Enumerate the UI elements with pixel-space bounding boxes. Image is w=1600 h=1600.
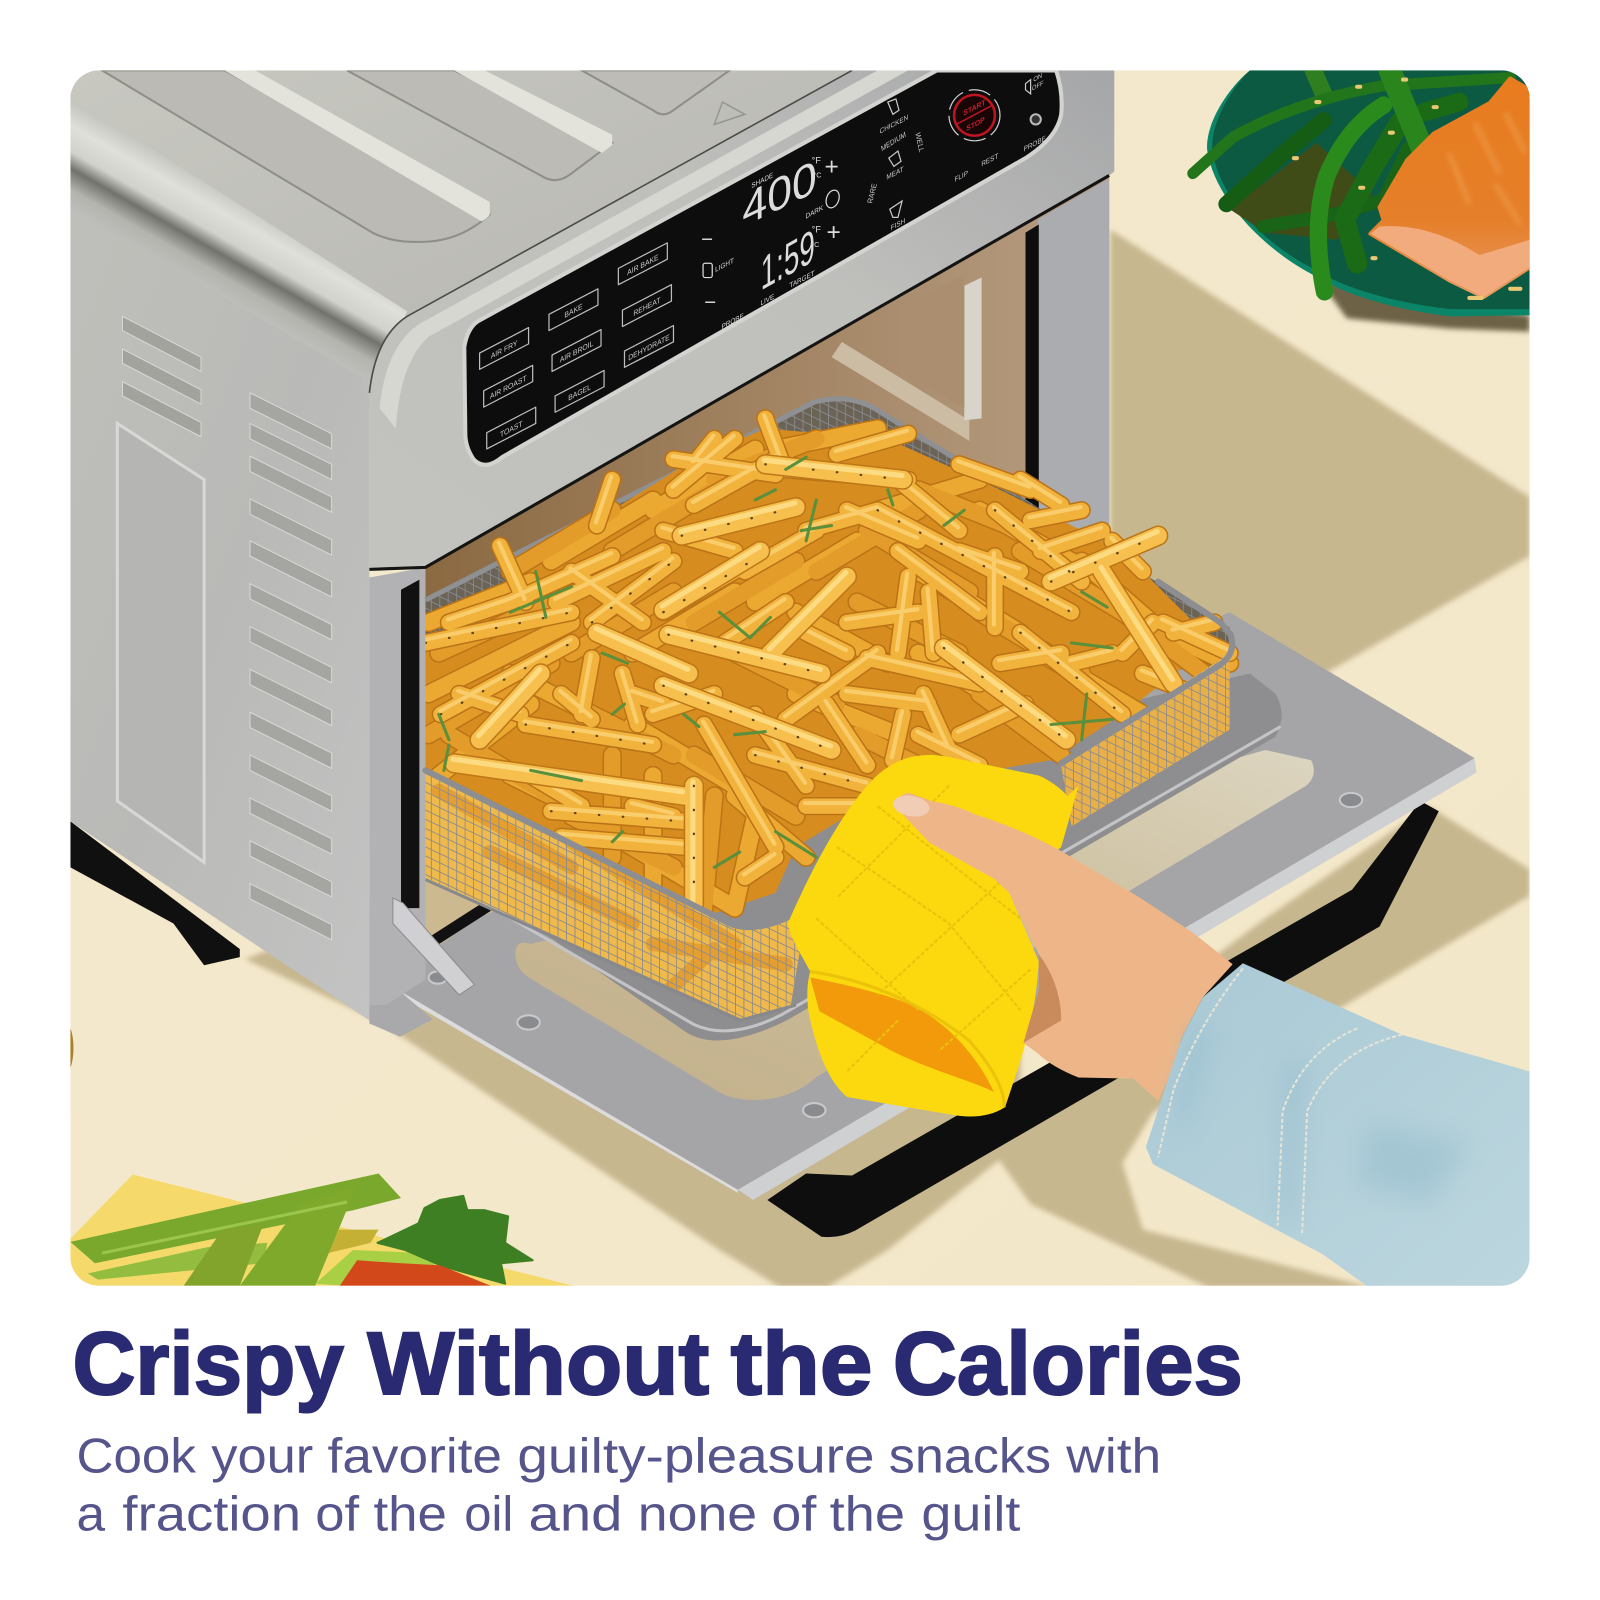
subtitle: with [1065, 1429, 1161, 1483]
start stop button [949, 90, 1000, 141]
fries behind mesh [439, 791, 786, 995]
mode button labels: DEHYDRATE [628, 332, 670, 363]
display readout: °F [812, 155, 821, 165]
oven mitt [788, 755, 1079, 1117]
door front lip [738, 758, 1477, 1200]
basket front mesh and rim [426, 582, 1232, 1020]
mitt fold shadow [810, 978, 994, 1092]
start stop button: STOP [966, 115, 985, 133]
subtitle: and [529, 1488, 622, 1542]
display readout: SHADE [751, 171, 773, 190]
subtitle: of [315, 1488, 360, 1542]
rounded top bevel [70, 97, 407, 408]
door hinge arm [393, 898, 474, 995]
mode button labels: AIR BAKE [627, 252, 659, 277]
subtitle: guilt [921, 1488, 1021, 1542]
plate shadow [1328, 285, 1530, 336]
subtitle: guilty-pleasure [517, 1429, 874, 1483]
front left mesh [426, 770, 806, 1020]
probe presets [865, 72, 1046, 232]
front right mesh [1061, 653, 1230, 827]
basket back mesh [426, 398, 1230, 714]
sleeve denim fade [1173, 1020, 1469, 1224]
mode button labels: BAGEL [568, 382, 591, 403]
hand [891, 793, 1233, 1101]
door handle [767, 801, 1439, 1237]
subtitle [77, 1429, 1161, 1542]
plate with salmon and green beans [1193, 70, 1530, 332]
tan gap behind hinge [426, 878, 440, 891]
oven body [70, 70, 1114, 1037]
probe port [1031, 114, 1041, 124]
probe presets: ON [1033, 72, 1042, 84]
salmon flesh underside [1370, 226, 1530, 297]
side face [70, 209, 369, 1020]
probe presets: RARE [865, 182, 879, 204]
celery sticks [70, 1173, 401, 1263]
salmon glaze streaks [1449, 112, 1526, 224]
thumbnail [891, 793, 931, 819]
mode button labels [490, 252, 670, 439]
fries deep layer [429, 429, 1230, 908]
herb sprigs [439, 457, 1112, 867]
door glass [515, 750, 1314, 1100]
countertop background [70, 70, 1530, 1286]
oven logo [714, 102, 745, 124]
side vents long [250, 393, 332, 940]
probe presets: FISH [891, 217, 905, 232]
display readout: 1:59 [761, 220, 815, 301]
plate [1207, 70, 1530, 316]
band top edge [369, 70, 852, 393]
preset icons [888, 80, 1031, 217]
display readout: °F [812, 225, 821, 235]
display readout: − [704, 292, 716, 314]
display readout [701, 151, 841, 331]
small counter object [61, 1026, 73, 1070]
cavity rails [832, 342, 969, 441]
mode button labels: BAKE [564, 302, 583, 320]
yellow napkin, celery and sauce [70, 1173, 573, 1286]
left front column [369, 567, 426, 1005]
display readout: + [827, 219, 841, 246]
title: Calories [893, 1314, 1243, 1413]
sleeve stitching [1158, 968, 1402, 1236]
mitt fold edge [810, 971, 1004, 1107]
subtitle: Cook [77, 1429, 196, 1483]
oven cavity [426, 176, 1110, 597]
display readout: LIVE [760, 292, 774, 308]
title: Crispy [72, 1314, 344, 1413]
raised top panels [102, 70, 490, 242]
display readout: + [824, 153, 839, 180]
right front column [1038, 178, 1110, 542]
subtitle: oil [464, 1488, 513, 1542]
photo panel [61, 70, 1530, 1288]
subtitle: favorite [328, 1429, 502, 1483]
title: the [731, 1314, 872, 1413]
left slot [401, 580, 419, 908]
display readout: DARK [805, 204, 823, 221]
probe presets: OFF [1032, 80, 1044, 93]
mode buttons [480, 243, 673, 449]
side recess [117, 423, 204, 862]
pepper specks [426, 464, 1158, 908]
display readout: LIGHT [715, 256, 734, 274]
black hinge bar [434, 906, 488, 941]
door frame [386, 612, 1474, 1200]
probe presets: PROBE [1024, 134, 1046, 154]
subtitle: your [211, 1429, 313, 1483]
subtitle: none [638, 1488, 757, 1542]
probe presets: REST [981, 152, 999, 169]
right slot [1026, 224, 1039, 515]
subtitle: fraction [122, 1488, 301, 1542]
foot [70, 821, 240, 965]
display readout: PROBE [722, 312, 744, 331]
door screws [429, 793, 1362, 1117]
side vents small [122, 316, 201, 437]
display readout: °C [811, 241, 819, 249]
subtitle: a [77, 1488, 106, 1542]
red sauce [340, 1260, 491, 1286]
control band [369, 70, 1114, 569]
top face [70, 70, 850, 317]
subtitle: snacks [889, 1429, 1051, 1483]
display readout: °C [813, 172, 821, 180]
display readout: − [701, 229, 713, 251]
basket rim [426, 582, 1232, 927]
mode button labels: TOAST [500, 419, 523, 439]
green beans [1193, 70, 1510, 292]
fries mid layer [424, 415, 1230, 878]
subtitle: of [771, 1488, 817, 1542]
probe presets: FLIP [955, 169, 968, 184]
napkin [70, 1174, 573, 1286]
start stop button: START [963, 97, 986, 118]
probe presets: MEDIUM [880, 129, 907, 153]
sesame seeds [1294, 80, 1520, 298]
celery highlights [102, 1202, 347, 1253]
display readout: TARGET [789, 269, 815, 290]
cast shadows on counter [245, 230, 1530, 1288]
probe presets: WELL [913, 132, 926, 153]
light/dark shade icons [703, 188, 842, 278]
mitt quilting [816, 786, 1031, 1071]
control panel [464, 70, 1062, 465]
probe presets: CHICKEN [880, 113, 908, 136]
fries top layer [453, 460, 1173, 908]
rounded oven foot [369, 994, 433, 1037]
mode button labels: REHEAT [633, 295, 661, 318]
display readout: 400 [742, 151, 817, 238]
subtitle: the [373, 1488, 447, 1542]
open oven door [386, 612, 1477, 1200]
hand crease [1023, 954, 1061, 1043]
drip tray [427, 673, 1282, 1041]
subtitle: the [830, 1488, 905, 1542]
fries base [426, 429, 1214, 913]
title: Without [367, 1314, 709, 1413]
mode button labels: AIR FRY [491, 338, 517, 361]
band lower edge [369, 176, 1109, 569]
denim sleeve [1146, 963, 1530, 1288]
mode button labels: AIR ROAST [490, 373, 527, 401]
fries pile [424, 415, 1230, 913]
mode button labels: AIR BROIL [560, 338, 593, 365]
probe presets: MEAT [886, 165, 904, 182]
salmon fillet [1370, 79, 1530, 297]
mitt body [788, 755, 1079, 1117]
parsley leaf [378, 1196, 533, 1284]
